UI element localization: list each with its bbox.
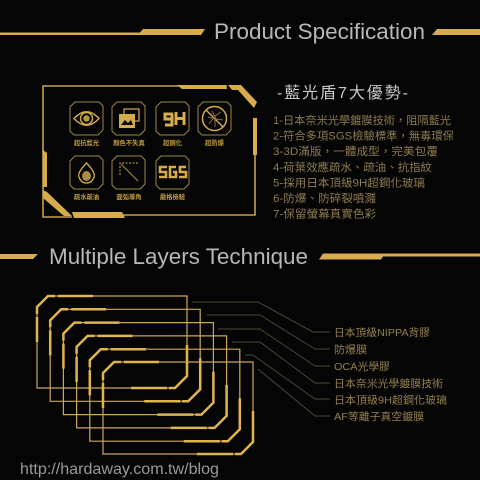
- icon label: 圓弧導角: [116, 192, 142, 201]
- list item 5: 5-採用日本頂級9H超鋼化玻璃: [273, 176, 425, 190]
- list item 4: 4-荷葉效應疏水、疏油、抗指紋: [273, 160, 432, 174]
- advantages list: [273, 113, 454, 220]
- icon label: 超防爆: [205, 138, 225, 147]
- leader lines: [192, 302, 330, 416]
- list item 3: 3-3D滿版，一體成型，完美包覆: [273, 144, 438, 158]
- list item 6: 6-防爆、防碎裂噴濺: [273, 191, 376, 205]
- layer 5: [90, 349, 240, 441]
- icon: true colour pictures: [112, 102, 145, 135]
- label: layer 3: OCA光學膠: [334, 360, 391, 373]
- diagram: stacked layers: [37, 296, 253, 454]
- list item 2: 2-符合多項SGS檢驗標準，無毒環保: [273, 128, 454, 142]
- icon label: 顏色不失真: [113, 138, 145, 147]
- icon: water and oil repellent drop: [70, 156, 103, 189]
- heading rule: top right: [432, 29, 480, 35]
- icon label: 超抗藍光: [74, 138, 100, 147]
- icon: explosion proof: [198, 102, 231, 135]
- heading rule: top left: [0, 29, 205, 35]
- layer 6: [103, 362, 253, 454]
- icon: rounded edge corner: [112, 156, 145, 189]
- panel frame: [43, 85, 257, 218]
- layer 1: [37, 296, 187, 388]
- icon: anti blue light eye: [70, 102, 103, 135]
- label: layer 4: 日本奈米光學鍍膜技術: [334, 377, 444, 390]
- icon label: 嚴格檢驗: [160, 192, 186, 201]
- label: layer 6: AF等離子真空鍍膜: [334, 410, 425, 423]
- footer url watermark: http://hardaway.com.tw/blog: [20, 461, 219, 478]
- icon label: 超鋼化: [163, 138, 183, 147]
- icon: 9H hardness: [156, 102, 189, 135]
- icon label: 疏水疏油: [74, 192, 99, 201]
- heading: Multiple Layers Technique: Multiple Layers Technique: [49, 244, 308, 269]
- layer 2: [50, 309, 200, 401]
- heading rule: middle right: [319, 254, 480, 260]
- label: layer 5: 日本頂級9H超鋼化玻璃: [334, 394, 447, 406]
- heading rule: middle left: [0, 254, 38, 259]
- list item 7: 7-保留螢幕真實色彩: [273, 206, 376, 220]
- label: layer 1: 日本頂級NIPPA背膠: [334, 326, 431, 339]
- label: layer 2: 防爆膜: [334, 343, 368, 356]
- layer 3: [63, 323, 213, 415]
- panel: feature icons: [43, 85, 257, 218]
- layer labels: [334, 326, 447, 423]
- icon: SGS certification: [156, 156, 189, 189]
- heading: Product Specification: Product Specification: [214, 19, 425, 44]
- layer 4: [77, 336, 227, 428]
- advantages title: -藍光盾7大優勢-: [277, 84, 408, 102]
- list item 1: 1-日本奈米光學鍍膜技術，阻隔藍光: [273, 113, 451, 127]
